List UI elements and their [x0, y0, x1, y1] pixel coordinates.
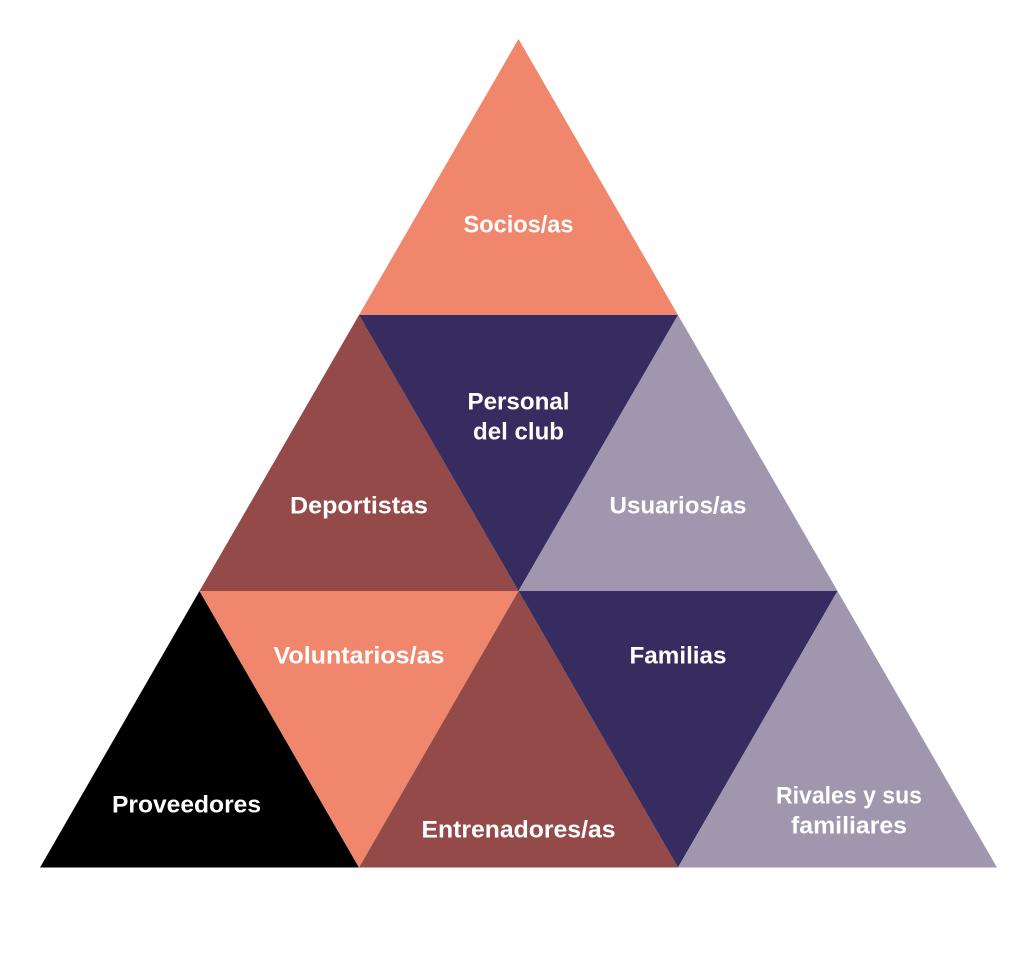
triangle: Usuarios/as: Usuarios/as: [610, 492, 746, 520]
triangle: Personal del club: del club: [473, 418, 564, 445]
triangle: Usuarios/as: [518, 315, 838, 591]
triangle: Familias: Familias: [630, 642, 726, 669]
triangle: Personal del club: Personal: [468, 388, 570, 415]
triangle: Voluntarios/as: [200, 591, 518, 868]
triangle: Proveedores: [40, 591, 359, 868]
triangle: Familias: [518, 591, 838, 868]
triangle: Personal del club: [359, 315, 678, 591]
triangle: Rivales y sus familiares: Rivales y sus: [776, 782, 922, 809]
triangle: Socios/as: [359, 39, 678, 315]
triangle: Proveedores: Proveedores: [112, 792, 261, 819]
triangle: Socios/as: Socios/as: [464, 212, 574, 239]
triangle: Deportistas: [200, 315, 518, 591]
triangle: Voluntarios/as: Voluntarios/as: [274, 642, 444, 669]
triangle: Deportistas: Deportistas: [290, 492, 428, 520]
triangle: Rivales y sus familiares: familiares: [791, 812, 907, 839]
triangle: Rivales y sus familiares: [678, 591, 997, 868]
triangle: Entrenadores/as: Entrenadores/as: [422, 817, 616, 844]
triangle: Entrenadores/as: [359, 591, 678, 868]
